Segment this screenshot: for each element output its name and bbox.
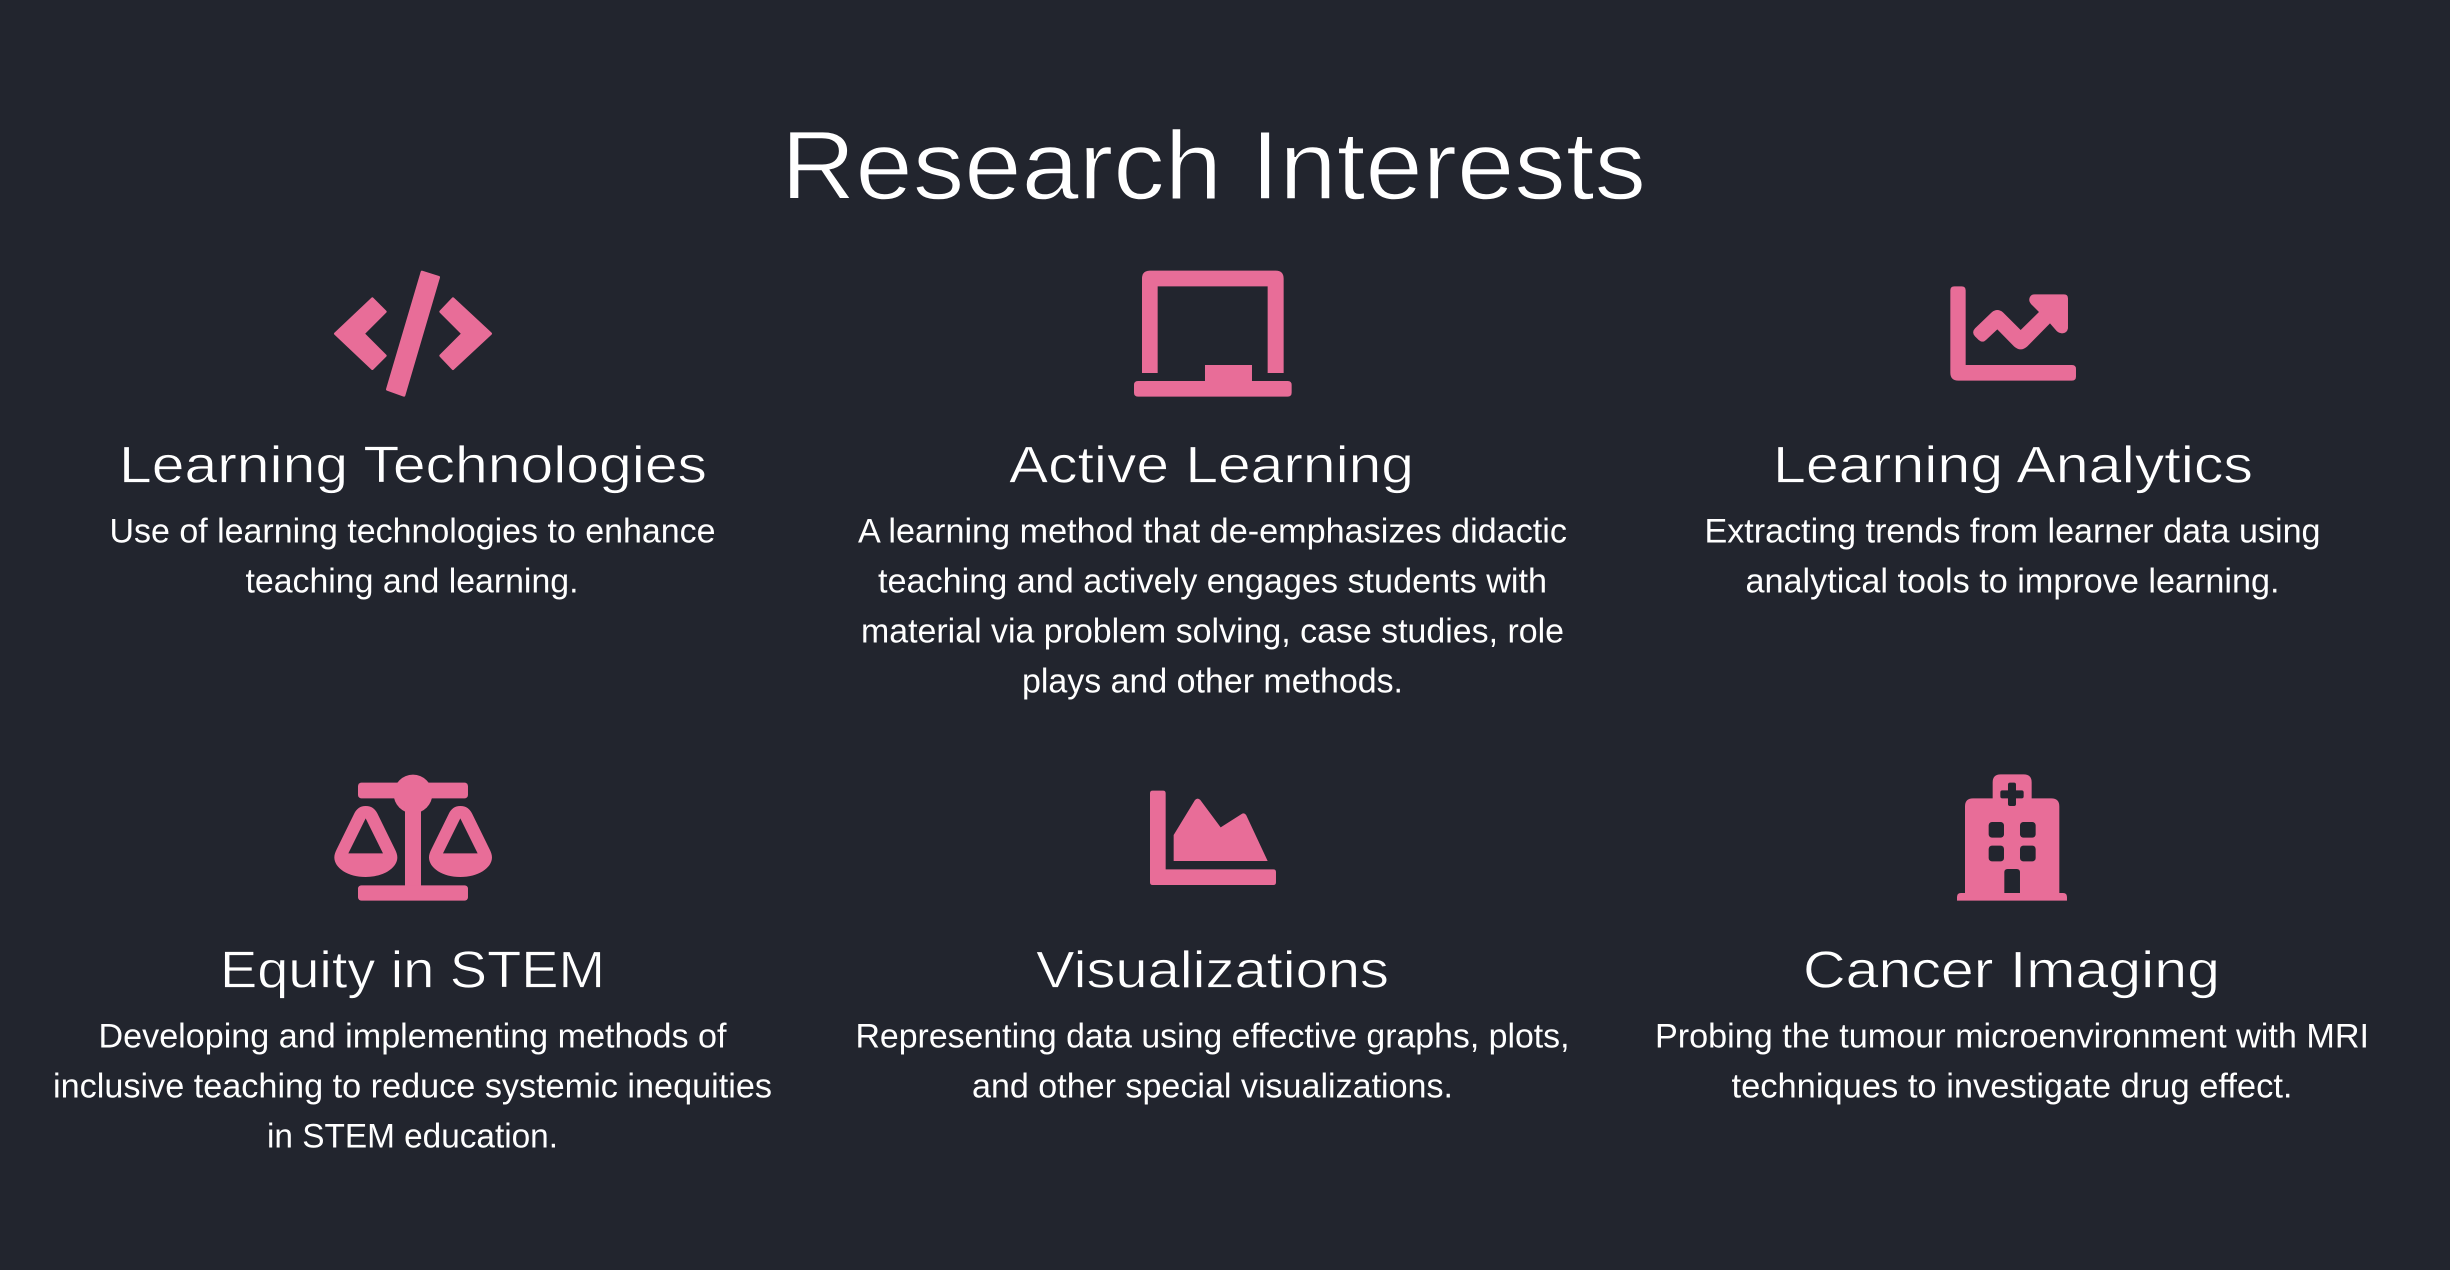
description: Developing and implementing methods of (98, 1018, 727, 1056)
description: A learning method that de-emphasizes didactic (858, 513, 1567, 551)
description: teaching and learning. (246, 563, 578, 601)
description: and other special visualizations. (972, 1068, 1453, 1106)
description: Representing data using effective graphs, plots, (856, 1018, 1570, 1056)
panel: equity in stem (53, 775, 772, 1156)
panel: visualizations (856, 791, 1570, 1106)
description (53, 1018, 772, 1156)
heading: Cancer Imaging (1803, 942, 2220, 1000)
panel: learning analytics (1704, 286, 2320, 601)
description (1655, 1018, 2369, 1106)
description: Use of learning technologies to enhance (110, 513, 716, 551)
icon: area chart (1150, 791, 1276, 885)
title: Research Interests (781, 111, 1646, 220)
description: analytical tools to improve learning. (1746, 563, 2280, 601)
description: techniques to investigate drug effect. (1732, 1068, 2292, 1106)
description: plays and other methods. (1022, 663, 1403, 701)
description (1704, 513, 2320, 601)
description: in STEM education. (267, 1118, 558, 1156)
description (858, 513, 1567, 701)
icon: chalkboard (1134, 271, 1292, 397)
heading: Learning Analytics (1773, 437, 2253, 495)
icon: code (335, 272, 491, 395)
heading: Active Learning (1009, 437, 1414, 495)
panel: active learning (858, 271, 1567, 701)
icon: balance scale (334, 775, 492, 901)
panel: learning technologies (110, 272, 716, 601)
description: inclusive teaching to reduce systemic inequities (53, 1068, 772, 1106)
description: Extracting trends from learner data using (1704, 513, 2320, 551)
description (856, 1018, 1570, 1106)
icon: line chart (1950, 286, 2076, 381)
panel: cancer imaging (1655, 774, 2369, 1106)
heading: Learning Technologies (119, 437, 707, 495)
heading: Visualizations (1036, 942, 1389, 1000)
description: teaching and actively engages students with (878, 563, 1547, 601)
description (110, 513, 716, 601)
icon: hospital (1957, 774, 2067, 901)
description: material via problem solving, case studies, role (861, 613, 1564, 651)
heading: Equity in STEM (220, 942, 605, 1000)
description: Probing the tumour microenvironment with MRI (1655, 1018, 2369, 1056)
